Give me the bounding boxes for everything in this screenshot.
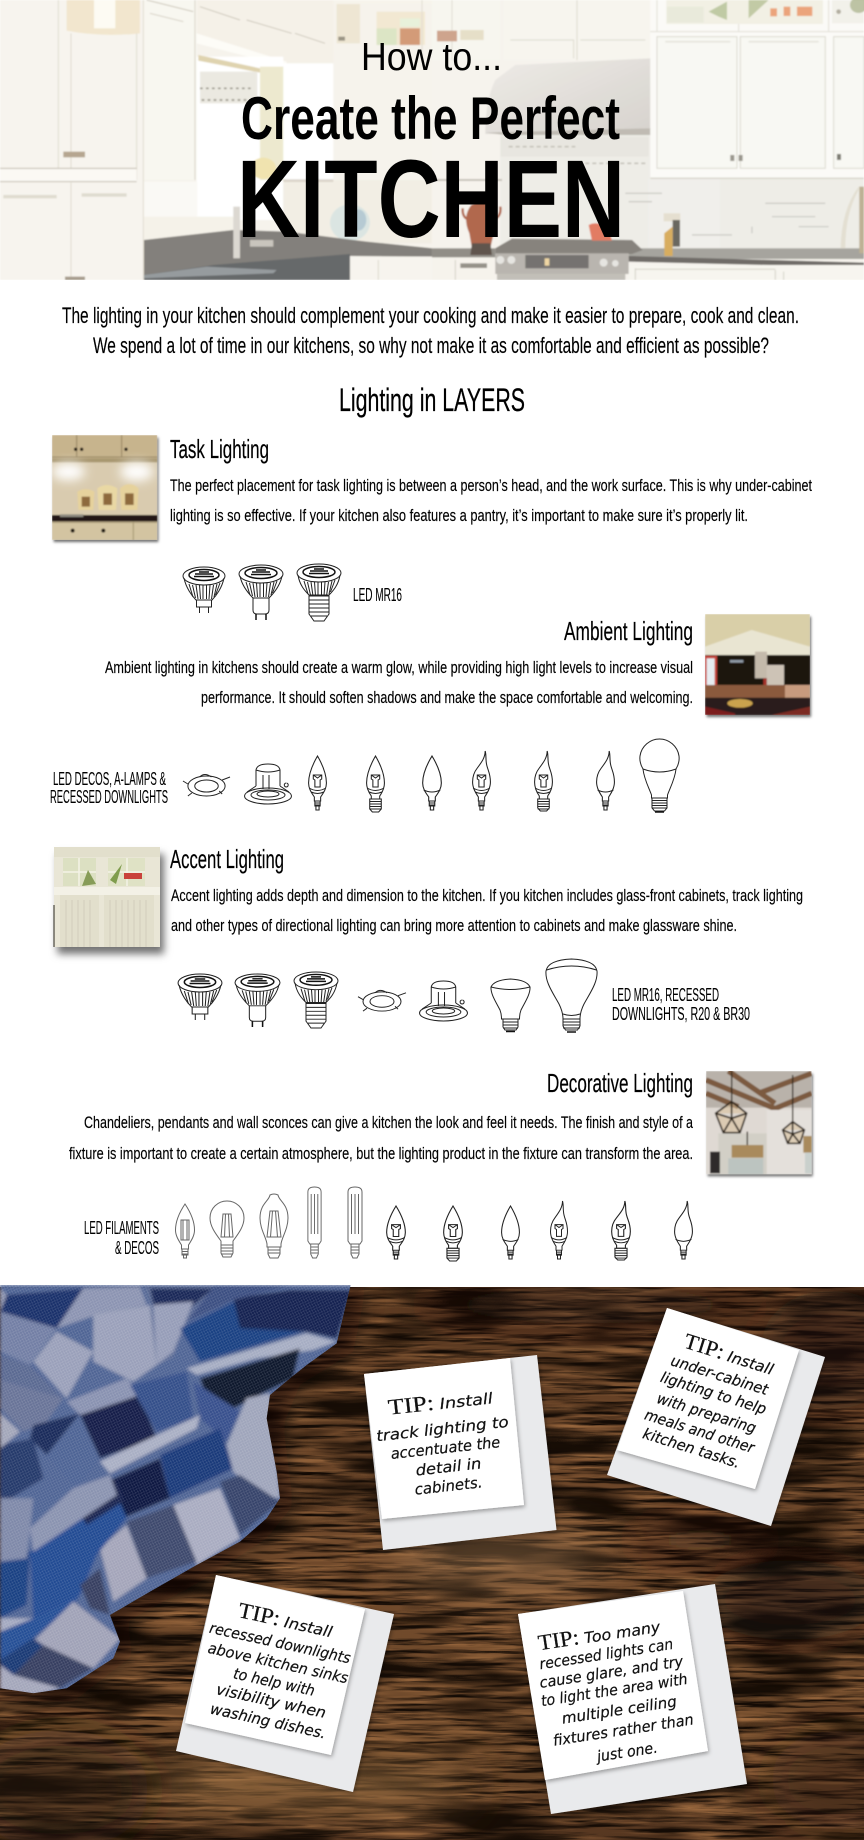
label: LED MR16, recessed downlights, R20 and BR30	[612, 985, 750, 1024]
body text: accent lighting	[171, 886, 803, 935]
heading: Task Lighting: Task Lighting	[170, 434, 269, 464]
label: LED MR16, recessed downlights, R20 and BR30: DOWNLIGHTS, R20 & BR30	[612, 1004, 750, 1024]
tip text: too many recessed lights: recessed lights can	[538, 1635, 674, 1673]
label: LED MR16: LED MR16	[353, 585, 402, 605]
tip text: track lighting	[375, 1383, 510, 1499]
title: How to...: How to...	[361, 36, 502, 79]
tip card: too many recessed lights	[518, 1584, 747, 1814]
tip text: under-cabinet lighting: under-cabinet	[669, 1352, 771, 1399]
tip text: too many recessed lights: multiple ceiling	[561, 1692, 678, 1728]
towel shadow	[0, 1285, 367, 1702]
body text: decorative lighting	[69, 1113, 693, 1163]
tip text: too many recessed lights: to light the area with	[540, 1670, 689, 1710]
tip text: under-cabinet lighting: meals and other	[642, 1406, 757, 1457]
tip text: too many recessed lights	[536, 1612, 695, 1766]
photo: accent lighting	[54, 847, 160, 947]
tip text: recessed downlights: recessed downlights	[208, 1619, 352, 1667]
tip text: track lighting: TIP: Install	[387, 1383, 495, 1420]
tip text: recessed downlights: visibility when	[214, 1680, 328, 1722]
hero kitchen photo	[0, 0, 864, 280]
section heading: Lighting in LAYERS: Lighting in LAYERS	[339, 382, 525, 418]
label: LED filaments and decos: & DECOS	[115, 1238, 159, 1258]
heading: Accent Lighting: Accent Lighting	[170, 844, 284, 874]
tip text: under-cabinet lighting	[641, 1328, 778, 1472]
panel: decorative lighting	[69, 1068, 812, 1261]
tip text: under-cabinet lighting: lighting to help	[658, 1368, 769, 1418]
title: KITCHEN: KITCHEN	[237, 138, 625, 261]
label: LED decos, A-lamps and recessed downlights: LED DECOS, A-LAMPS &	[53, 769, 166, 789]
tip text: too many recessed lights: fixtures rather than	[552, 1710, 695, 1750]
tip card: recessed downlights	[176, 1575, 394, 1792]
tip card: track lighting	[364, 1355, 556, 1550]
tip text: track lighting: accentuate the	[390, 1433, 501, 1463]
title: Create the Perfect: Create the Perfect	[241, 85, 620, 152]
tip text: under-cabinet lighting: kitchen tasks.	[641, 1425, 742, 1472]
tip text: too many recessed lights: TIP: Too many	[536, 1612, 663, 1655]
tip text: track lighting: cabinets.	[414, 1473, 483, 1499]
body text: ambient lighting: performance. It should soften shadows and make the space comfortable and welcoming.	[201, 688, 693, 707]
heading: Ambient Lighting: Ambient Lighting	[564, 616, 693, 646]
tip text: recessed downlights: above kitchen sinks	[206, 1639, 350, 1687]
icons: decos, recessed and A-lamp bulbs	[183, 739, 679, 812]
panel: task lighting	[52, 434, 812, 621]
label: LED decos, A-lamps and recessed downlights: RECESSED DOWNLIGHTS	[50, 787, 168, 807]
panel: accent lighting	[54, 844, 803, 1032]
icons: filament and deco bulbs	[176, 1187, 692, 1261]
label: LED MR16, recessed downlights, R20 and BR30: LED MR16, RECESSED	[612, 985, 719, 1005]
tip text: under-cabinet lighting: with preparing	[655, 1389, 758, 1437]
label: LED decos, A-lamps and recessed downlights	[50, 769, 168, 807]
heading: Decorative Lighting: Decorative Lighting	[547, 1068, 693, 1098]
photo: ambient lighting	[705, 614, 810, 715]
tip card: under-cabinet lighting	[607, 1308, 825, 1526]
tip text: under-cabinet lighting: TIP: Install	[681, 1328, 778, 1380]
blue and white checked towel	[0, 1285, 353, 1698]
panel: wooden table with tips	[0, 1285, 864, 1840]
tip text: recessed downlights: to help with	[232, 1664, 317, 1700]
tip text: recessed downlights: washing dishes.	[209, 1700, 328, 1743]
tip text: track lighting: track lighting to	[375, 1413, 510, 1445]
label: LED filaments and decos	[84, 1218, 159, 1258]
tip text: track lighting: detail in	[415, 1454, 482, 1480]
wood table background	[0, 1285, 864, 1840]
tip text: recessed downlights	[206, 1597, 352, 1743]
body text: task lighting	[170, 476, 812, 525]
icons: LED MR16 bulbs	[183, 564, 341, 621]
hero panel: kitchen photo with title	[0, 0, 864, 280]
photo: decorative lighting	[706, 1071, 812, 1174]
intro text	[62, 303, 799, 358]
panel: ambient lighting	[50, 614, 810, 812]
label: LED filaments and decos: LED FILAMENTS	[84, 1218, 159, 1238]
body text: ambient lighting	[105, 658, 693, 707]
tip text: too many recessed lights: just one.	[594, 1739, 659, 1766]
icons: MR16, recessed, R20 and BR30 bulbs	[178, 959, 597, 1032]
tip text: recessed downlights: TIP: Install	[236, 1597, 336, 1642]
tip text: too many recessed lights: cause glare, and try	[538, 1652, 685, 1692]
photo: task lighting	[52, 435, 157, 540]
